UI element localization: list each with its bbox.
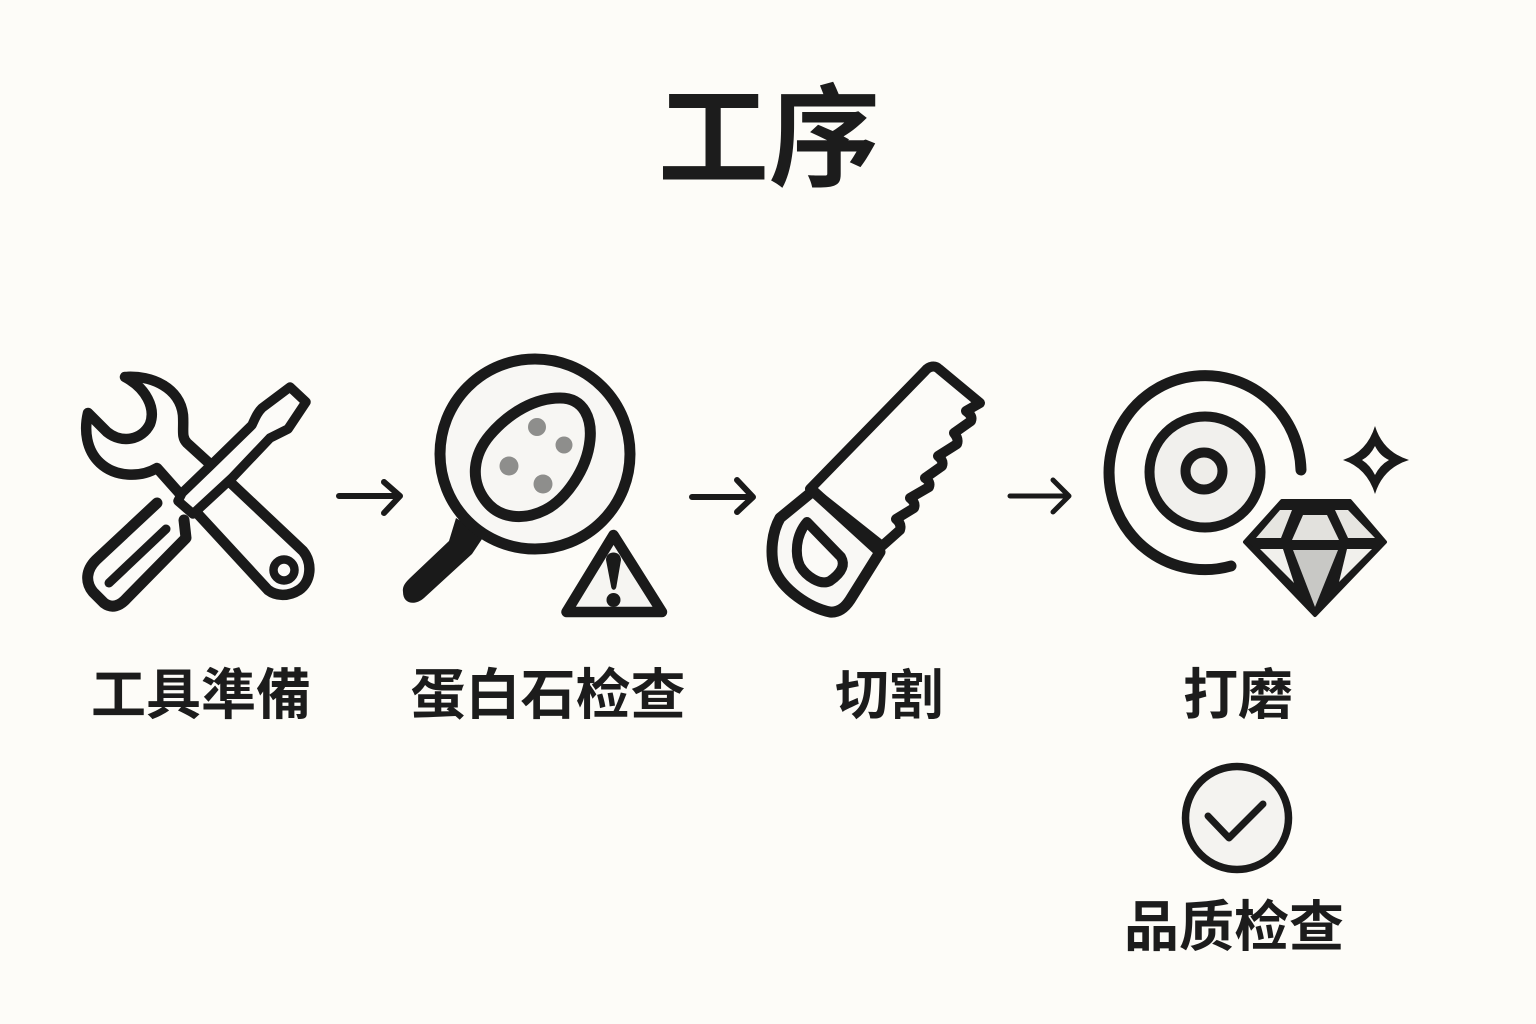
wheel middle ring — [1150, 416, 1260, 528]
label: opal inspection: 蛋白石检查 — [410, 664, 686, 726]
icon: saw — [772, 367, 980, 612]
icon: polishing wheel and gem — [1109, 376, 1409, 615]
label: tool preparation: 工具準備 — [91, 664, 311, 726]
icon: check circle — [1186, 766, 1288, 870]
wrench — [86, 377, 309, 595]
saw blade — [810, 367, 980, 546]
magnifier lens — [440, 359, 630, 549]
saw handle — [772, 491, 880, 612]
arrow 1 — [339, 482, 400, 513]
arrow 3 — [1010, 480, 1069, 512]
wheel outer arc — [1109, 376, 1301, 570]
icon: magnifier inspecting opal — [403, 359, 662, 612]
screwdriver handle — [88, 503, 186, 606]
arrow 2 — [692, 480, 753, 512]
screwdriver shaft and tip — [178, 387, 306, 514]
magnifier handle — [403, 518, 484, 603]
icon: warning triangle — [566, 535, 662, 612]
label: polishing: 打磨 — [1183, 664, 1293, 726]
sparkle — [1343, 426, 1409, 494]
label: cutting: 切割 — [835, 666, 943, 726]
screwdriver slot — [109, 529, 166, 583]
wrench hole — [274, 560, 294, 580]
title: 工序 — [658, 77, 880, 201]
saw handle grip — [797, 522, 843, 582]
label: quality inspection: 品质检查 — [1124, 896, 1344, 958]
icon: wrench and screwdriver — [86, 377, 309, 606]
opal outline — [475, 398, 590, 517]
opal spots — [500, 418, 572, 494]
wheel hub — [1186, 452, 1222, 490]
gem — [1245, 501, 1385, 615]
